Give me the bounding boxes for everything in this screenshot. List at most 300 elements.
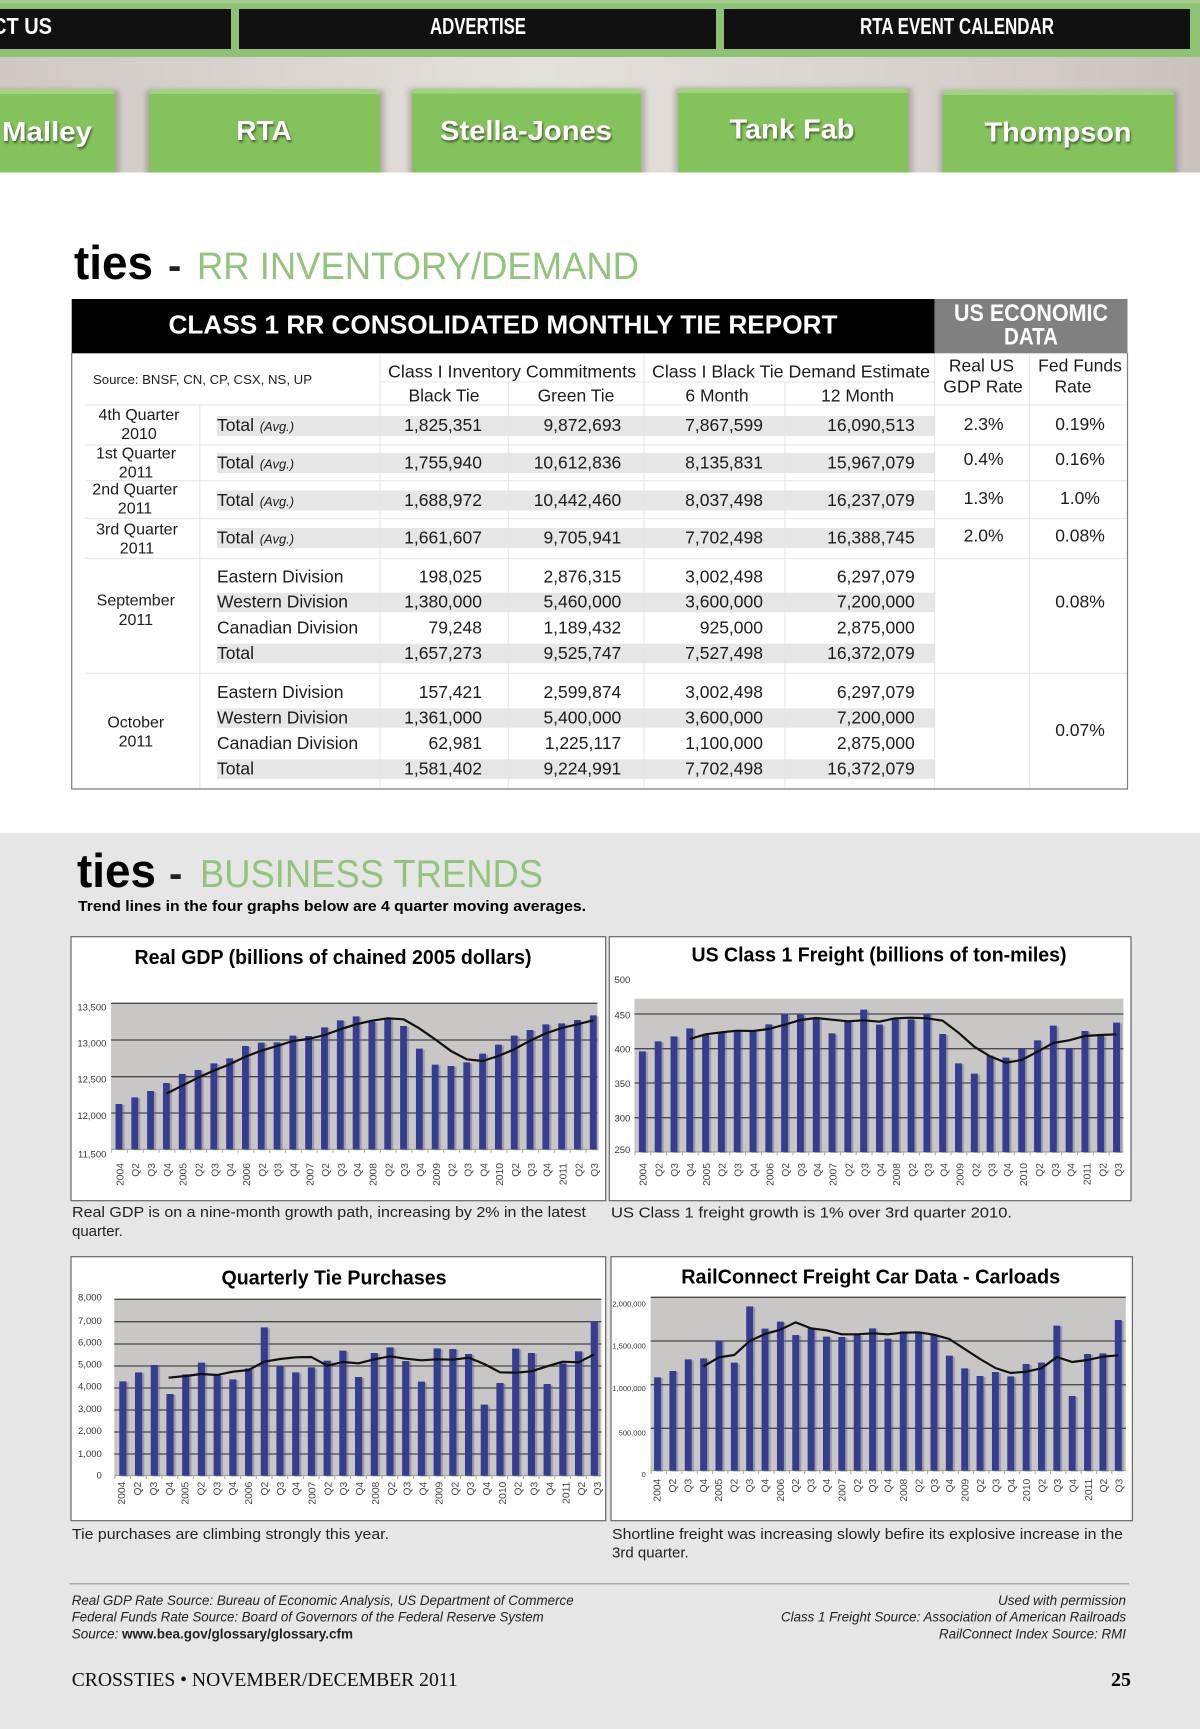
x axis labels: Q2 bbox=[908, 1163, 919, 1177]
x axis labels: Q2 bbox=[384, 1163, 395, 1177]
rows: October 2011: 1,361,000 bbox=[404, 707, 482, 727]
x axis labels: 2009 bbox=[956, 1163, 967, 1186]
x axis labels: 2011 bbox=[1083, 1163, 1094, 1185]
plot with bars and trend line bbox=[111, 1003, 597, 1151]
x axis labels: Q4 bbox=[884, 1478, 895, 1492]
x axis labels bbox=[115, 1163, 601, 1186]
rows: September 2011: 0.08% bbox=[1055, 591, 1105, 611]
nav item: advertise: ADVERTISE bbox=[430, 13, 526, 39]
x axis labels: Q3 bbox=[683, 1478, 694, 1492]
row: 3rd quarter 2011: 7,702,498 bbox=[685, 527, 763, 547]
rows: October 2011: 2,875,000 bbox=[837, 733, 915, 753]
y axis labels: 1,000 bbox=[78, 1449, 102, 1460]
row: 4th quarter 2010: 2.3% bbox=[964, 414, 1004, 434]
rows: October 2011: 2011 bbox=[119, 734, 153, 751]
x axis labels: Q3 bbox=[464, 1163, 475, 1177]
row: 2nd quarter 2011: 1.0% bbox=[1060, 488, 1100, 508]
y axis labels: 500 bbox=[614, 975, 630, 986]
x axis labels: Q2 bbox=[131, 1163, 142, 1177]
x axis labels: Q3 bbox=[593, 1481, 604, 1495]
y axis labels: 500,000 bbox=[619, 1428, 646, 1437]
rows: October 2011: 7,200,000 bbox=[837, 707, 915, 727]
rows: September 2011: Eastern Division bbox=[217, 566, 343, 586]
row: 3rd quarter 2011: 9,705,941 bbox=[543, 527, 621, 547]
heading: ties - RR inventory/demand: RR INVENTORY/DEMAND bbox=[197, 246, 639, 288]
x axis labels: Q3 bbox=[868, 1478, 879, 1492]
US economic data header bbox=[935, 299, 1128, 353]
y axis labels: 3,000 bbox=[78, 1404, 102, 1415]
rows: September 2011: 79,248 bbox=[428, 617, 482, 637]
rows: September 2011: 9,525,747 bbox=[543, 643, 621, 663]
source notes left: Federal Funds Rate Source: Board of Governors of the Federal Reserve System bbox=[72, 1610, 544, 1625]
row: 1st quarter 2011 bbox=[96, 445, 1105, 481]
x axis labels: Q4 bbox=[822, 1478, 833, 1492]
y axis labels: 13,000 bbox=[77, 1039, 106, 1050]
x axis labels: Q4 bbox=[543, 1163, 554, 1177]
y axis labels: 400 bbox=[614, 1045, 630, 1056]
x axis labels: Q4 bbox=[226, 1163, 237, 1177]
x axis labels: Q4 bbox=[749, 1163, 760, 1177]
rows: October 2011: 9,224,991 bbox=[543, 758, 621, 778]
rows: October 2011: 7,702,498 bbox=[685, 758, 763, 778]
row: 4th quarter 2010: 16,090,513 bbox=[827, 415, 915, 435]
table title bar bbox=[72, 299, 935, 353]
row: 2nd quarter 2011: 1,688,972 bbox=[404, 490, 482, 510]
x axis labels: 2005 bbox=[181, 1481, 192, 1505]
button: Stella-Jones: Stella-Jones bbox=[440, 115, 612, 146]
row: 4th quarter 2010: 1,825,351 bbox=[404, 415, 482, 435]
rows: October 2011: 5,400,000 bbox=[543, 707, 622, 727]
rows: September 2011: 16,372,079 bbox=[827, 643, 915, 663]
rows: September 2011: Total bbox=[217, 643, 254, 663]
chart title: Quarterly Tie Purchases bbox=[222, 1267, 446, 1289]
heading: ties - business trends: ties bbox=[77, 844, 156, 897]
row: 1st quarter 2011: Total bbox=[217, 452, 254, 472]
row: 2nd quarter 2011: Total bbox=[217, 490, 254, 510]
x axis labels: Q4 bbox=[355, 1481, 366, 1495]
button: Thompson: Thompson bbox=[984, 117, 1132, 148]
row: 3rd quarter 2011 bbox=[96, 521, 1105, 557]
rows: September 2011: Canadian Division bbox=[217, 617, 358, 637]
x axis labels: Q3 bbox=[527, 1163, 538, 1177]
button: Tank Fab: Tank Fab bbox=[730, 114, 854, 145]
x axis labels: 2011 bbox=[559, 1163, 570, 1185]
rows: October 2011: 3,002,498 bbox=[685, 682, 763, 702]
row: 4th quarter 2010: Total bbox=[217, 415, 254, 435]
x axis labels: 2010 bbox=[495, 1163, 506, 1186]
chart: US Class 1 Freight bbox=[609, 937, 1131, 1222]
rows: October 2011: 16,372,079 bbox=[827, 758, 915, 778]
x axis labels: Q3 bbox=[924, 1163, 935, 1177]
column headers: Black Tie bbox=[408, 385, 480, 405]
nav item: contact us bbox=[0, 9, 231, 49]
y axis labels: 1,500,000 bbox=[612, 1341, 646, 1350]
source notes left: Source: www.bea.gov/glossary/glossary.cfm bbox=[72, 1626, 353, 1641]
row: 4th quarter 2010: 9,872,693 bbox=[543, 415, 621, 435]
x axis labels: Q2 bbox=[668, 1478, 679, 1492]
x axis labels: Q2 bbox=[976, 1478, 987, 1492]
rows: October 2011: 0.07% bbox=[1055, 720, 1105, 740]
chart title: US Class 1 Freight (billions of ton-miles) bbox=[692, 945, 1066, 967]
x axis labels: Q2 bbox=[853, 1478, 864, 1492]
y axis labels: 2,000,000 bbox=[612, 1299, 646, 1308]
row: 2nd quarter 2011: 10,442,460 bbox=[534, 490, 622, 510]
row: 2nd quarter 2011: 1.3% bbox=[964, 488, 1004, 508]
x axis labels: Q2 bbox=[514, 1481, 525, 1495]
rows: September 2011: 6,297,079 bbox=[837, 566, 915, 586]
rows: September 2011: 5,460,000 bbox=[543, 592, 622, 612]
button: Stella-Jones bbox=[412, 88, 641, 172]
button: Malley bbox=[0, 89, 115, 172]
x axis labels: Q3 bbox=[210, 1163, 221, 1177]
rows: October 2011: 3,600,000 bbox=[685, 707, 763, 727]
nav item: RTA event calendar: RTA EVENT CALENDAR bbox=[860, 13, 1054, 39]
x axis labels: Q2 bbox=[718, 1163, 729, 1177]
x axis labels: Q4 bbox=[418, 1481, 429, 1495]
source notes right bbox=[781, 1593, 1126, 1641]
x axis labels: Q4 bbox=[163, 1163, 174, 1177]
row: 1st quarter 2011: 2011 bbox=[119, 464, 153, 481]
x axis labels: Q4 bbox=[940, 1163, 951, 1177]
x axis labels: 2008 bbox=[899, 1478, 910, 1502]
footer: publication line: CROSSTIES • NOVEMBER/DECEMBER 2011 bbox=[72, 1669, 458, 1691]
x axis labels: Q3 bbox=[1053, 1478, 1064, 1492]
row: 4th quarter 2010: 7,867,599 bbox=[685, 415, 763, 435]
x axis labels: Q3 bbox=[400, 1163, 411, 1177]
x axis labels: Q3 bbox=[670, 1163, 681, 1177]
y axis labels: 250 bbox=[614, 1145, 630, 1156]
rows: September 2011: 7,527,498 bbox=[685, 643, 763, 663]
source notes left: Real GDP Rate Source: Bureau of Economic Analysis, US Department of Commerce bbox=[72, 1593, 574, 1608]
row: 2nd quarter 2011: 2nd Quarter bbox=[92, 481, 178, 498]
x axis labels: 2010 bbox=[1022, 1478, 1033, 1502]
caption bbox=[612, 1526, 1123, 1562]
x axis labels: Q3 bbox=[149, 1481, 160, 1495]
rows: September 2011: 3,002,498 bbox=[685, 566, 763, 586]
y axis labels: 11,500 bbox=[78, 1149, 106, 1160]
x axis labels: 2011 bbox=[561, 1481, 572, 1504]
x axis labels: Q3 bbox=[466, 1481, 477, 1495]
x axis labels: Q2 bbox=[450, 1481, 461, 1495]
x axis labels: Q2 bbox=[194, 1163, 205, 1177]
x axis labels: Q2 bbox=[323, 1481, 334, 1495]
tab band with green company buttons bbox=[0, 57, 1200, 196]
x axis labels: Q4 bbox=[1068, 1478, 1079, 1492]
x axis labels: Q2 bbox=[260, 1481, 271, 1495]
column headers: Class I Black Tie Demand Estimate bbox=[652, 361, 930, 381]
chart title: RailConnect Freight Car Data - Carloads bbox=[681, 1266, 1060, 1288]
x axis labels: Q2 bbox=[577, 1481, 588, 1495]
x axis labels: Q2 bbox=[845, 1163, 856, 1177]
row: 3rd quarter 2011: 2.0% bbox=[964, 526, 1004, 546]
x axis labels: Q2 bbox=[511, 1163, 522, 1177]
x axis labels: Q2 bbox=[258, 1163, 269, 1177]
column headers: Fed Funds bbox=[1038, 356, 1122, 376]
column headers: Source: BNSF, CN, CP, CSX, NS, UP bbox=[93, 372, 312, 387]
nav item: RTA event calendar bbox=[724, 9, 1190, 49]
table title bar: CLASS 1 RR CONSOLIDATED MONTHLY TIE REPORT bbox=[168, 309, 838, 339]
x axis labels: Q3 bbox=[807, 1478, 818, 1492]
row: 1st quarter 2011: 15,967,079 bbox=[827, 452, 915, 472]
row: 3rd quarter 2011: 2011 bbox=[120, 540, 154, 557]
row: 1st quarter 2011: 0.16% bbox=[1055, 449, 1105, 469]
rows: October 2011: Total bbox=[217, 758, 254, 778]
rows: October 2011: 62,981 bbox=[428, 733, 482, 753]
source notes right: Class 1 Freight Source: Association of American Railroads bbox=[781, 1610, 1126, 1625]
caption: Tie purchases are climbing strongly this year. bbox=[72, 1526, 389, 1543]
column headers: Rate bbox=[1055, 377, 1091, 397]
x axis labels: Q2 bbox=[972, 1163, 983, 1177]
note: trend lines: Trend lines in the four graphs below are 4 quarter moving averages. bbox=[78, 898, 586, 915]
row: 4th quarter 2010: 2010 bbox=[121, 426, 157, 443]
row: 1st quarter 2011: 10,612,836 bbox=[534, 452, 621, 472]
caption: Shortline freight was increasing slowly befire its explosive increase in the bbox=[612, 1526, 1123, 1543]
y axis labels: 5,000 bbox=[78, 1360, 102, 1371]
x axis labels: Q3 bbox=[530, 1481, 541, 1495]
footer: page number: 25 bbox=[1111, 1669, 1131, 1691]
x axis labels: Q4 bbox=[545, 1481, 556, 1495]
x axis labels: Q2 bbox=[133, 1481, 144, 1495]
row: 3rd quarter 2011: 1,661,607 bbox=[404, 527, 482, 547]
row: 2nd quarter 2011: 8,037,498 bbox=[685, 490, 763, 510]
x axis labels: Q4 bbox=[760, 1478, 771, 1492]
button: Tank Fab bbox=[678, 88, 908, 172]
table band shading bbox=[217, 416, 935, 779]
y axis labels bbox=[614, 975, 630, 1156]
x axis labels: Q2 bbox=[448, 1163, 459, 1177]
rows: September 2011: 1,189,432 bbox=[543, 617, 621, 637]
x axis labels: Q2 bbox=[1035, 1163, 1046, 1177]
caption: 3rd quarter. bbox=[612, 1545, 689, 1562]
heading: ties - business trends: BUSINESS TRENDS bbox=[200, 853, 543, 896]
x axis labels: Q3 bbox=[212, 1481, 223, 1495]
heading: ties - RR inventory/demand bbox=[74, 236, 639, 289]
x axis labels bbox=[117, 1481, 604, 1505]
y axis labels: 1,000,000 bbox=[612, 1384, 646, 1393]
row: 1st quarter 2011: (Avg.) bbox=[260, 456, 294, 471]
caption: Real GDP is on a nine-month growth path, increasing by 2% in the latest bbox=[72, 1204, 587, 1221]
y axis labels: 300 bbox=[614, 1114, 630, 1125]
rows: September 2011: 1,657,273 bbox=[404, 643, 482, 663]
row: 3rd quarter 2011: Total bbox=[217, 527, 254, 547]
row: 1st quarter 2011: 1,755,940 bbox=[404, 452, 482, 472]
row: 2nd quarter 2011: 16,237,079 bbox=[827, 490, 915, 510]
row: 3rd quarter 2011: 16,388,745 bbox=[827, 527, 915, 547]
y axis labels: 0 bbox=[97, 1470, 102, 1481]
row: 4th quarter 2010: 0.19% bbox=[1055, 414, 1105, 434]
heading: ties - business trends bbox=[77, 844, 543, 897]
x axis labels: Q2 bbox=[730, 1478, 741, 1492]
x axis labels: 2004 bbox=[117, 1481, 128, 1505]
row: 3rd quarter 2011: 0.08% bbox=[1055, 526, 1105, 546]
rows: September 2011: 3,600,000 bbox=[685, 592, 763, 612]
x axis labels: Q3 bbox=[987, 1163, 998, 1177]
x axis labels: 2005 bbox=[179, 1163, 190, 1186]
US economic data header: US ECONOMIC bbox=[954, 300, 1108, 327]
x axis labels: Q3 bbox=[147, 1163, 158, 1177]
x axis labels: Q2 bbox=[791, 1478, 802, 1492]
button: Malley: Malley bbox=[2, 116, 92, 147]
y axis labels: 6,000 bbox=[78, 1338, 102, 1349]
rows: September 2011: 198,025 bbox=[419, 566, 482, 586]
rows: September 2011: 7,200,000 bbox=[837, 592, 915, 612]
rows: October 2011: Western Division bbox=[217, 707, 348, 727]
rows: October 2011: 2,599,874 bbox=[543, 682, 622, 702]
column headers: GDP Rate bbox=[943, 377, 1023, 397]
panel: consolidated monthly tie report table bbox=[72, 299, 1128, 789]
x axis labels: Q3 bbox=[734, 1163, 745, 1177]
caption: US Class 1 freight growth is 1% over 3rd quarter 2010. bbox=[611, 1205, 1012, 1222]
x axis labels: Q2 bbox=[781, 1163, 792, 1177]
rows: September 2011 bbox=[97, 566, 1105, 663]
x axis labels: Q3 bbox=[337, 1163, 348, 1177]
plot with bars and trend line bbox=[651, 1297, 1126, 1472]
heading: ties - RR inventory/demand: - bbox=[168, 244, 181, 288]
x axis labels: 2006 bbox=[765, 1163, 776, 1186]
x axis labels bbox=[638, 1163, 1125, 1186]
x axis labels: 2007 bbox=[829, 1163, 840, 1186]
row: 2nd quarter 2011: 2011 bbox=[118, 500, 152, 517]
x axis labels: Q4 bbox=[165, 1481, 176, 1495]
column headers: Class I Inventory Commitments bbox=[388, 361, 636, 381]
x axis labels: Q3 bbox=[991, 1478, 1002, 1492]
row: 1st quarter 2011: 0.4% bbox=[964, 449, 1004, 469]
rows: September 2011: 2,875,000 bbox=[837, 617, 915, 637]
x axis labels: 2011 bbox=[1084, 1478, 1095, 1501]
x axis labels: Q4 bbox=[1003, 1163, 1014, 1177]
x axis labels: Q4 bbox=[479, 1163, 490, 1177]
nav item: advertise bbox=[239, 9, 716, 49]
heading: ties - business trends: - bbox=[169, 852, 182, 896]
x axis labels: Q3 bbox=[797, 1163, 808, 1177]
rows: October 2011: 6,297,079 bbox=[837, 682, 915, 702]
y axis labels bbox=[612, 1299, 646, 1479]
row: 4th quarter 2010: (Avg.) bbox=[260, 419, 294, 434]
x axis labels: Q2 bbox=[574, 1163, 585, 1177]
x axis labels: Q2 bbox=[1099, 1478, 1110, 1492]
rows: September 2011: 925,000 bbox=[700, 617, 763, 637]
x axis labels: Q3 bbox=[860, 1163, 871, 1177]
x axis labels: 2007 bbox=[837, 1478, 848, 1502]
row: 3rd quarter 2011: (Avg.) bbox=[260, 531, 294, 546]
chart: RailConnect Freight Car Data - Carloads bbox=[611, 1257, 1132, 1562]
rows: October 2011: Canadian Division bbox=[217, 733, 358, 753]
x axis labels: 2004 bbox=[115, 1163, 126, 1186]
y axis labels bbox=[78, 1292, 102, 1481]
rows: October 2011: 157,421 bbox=[419, 682, 482, 702]
rows: September 2011: Western Division bbox=[217, 592, 348, 612]
x axis labels: Q2 bbox=[654, 1163, 665, 1177]
caption: quarter. bbox=[72, 1223, 123, 1240]
x axis labels: 2008 bbox=[892, 1163, 903, 1186]
x axis labels: Q3 bbox=[276, 1481, 287, 1495]
rows: October 2011 bbox=[107, 682, 1105, 778]
y axis labels: 2,000 bbox=[78, 1426, 102, 1437]
plot with bars and trend line bbox=[634, 999, 1123, 1154]
button: RTA: RTA bbox=[236, 115, 292, 146]
x axis labels: Q3 bbox=[590, 1163, 601, 1177]
x axis labels: 2007 bbox=[305, 1163, 316, 1186]
rows: September 2011: 2011 bbox=[119, 612, 153, 629]
x axis labels: 2007 bbox=[308, 1481, 318, 1505]
x axis labels: Q2 bbox=[196, 1481, 208, 1495]
y axis labels: 0 bbox=[642, 1470, 646, 1479]
plot with bars and trend line bbox=[114, 1299, 601, 1477]
x axis labels: Q4 bbox=[686, 1163, 697, 1177]
y axis labels: 350 bbox=[614, 1079, 630, 1090]
row: 2nd quarter 2011 bbox=[92, 481, 1100, 517]
x axis labels: Q4 bbox=[353, 1163, 364, 1177]
top navigation bar bbox=[0, 0, 1200, 57]
rows: September 2011: September bbox=[97, 593, 176, 610]
x axis labels: Q4 bbox=[813, 1163, 824, 1177]
row: 3rd quarter 2011: 3rd Quarter bbox=[96, 521, 179, 538]
y axis labels: 13,500 bbox=[77, 1003, 106, 1014]
x axis labels: Q2 bbox=[1038, 1478, 1049, 1492]
rows: September 2011: 1,380,000 bbox=[404, 592, 482, 612]
heading: ties - RR inventory/demand: ties bbox=[74, 236, 153, 289]
row: 2nd quarter 2011: (Avg.) bbox=[260, 494, 294, 509]
y axis labels: 8,000 bbox=[78, 1292, 102, 1303]
chart title: Real GDP (billions of chained 2005 dollars) bbox=[134, 947, 532, 969]
row: 1st quarter 2011: 1st Quarter bbox=[96, 445, 177, 462]
x axis labels: 2009 bbox=[961, 1478, 972, 1502]
x axis labels: Q3 bbox=[930, 1478, 941, 1492]
x axis labels: Q4 bbox=[416, 1163, 427, 1177]
column headers bbox=[93, 356, 1122, 405]
x axis labels: 2010 bbox=[1019, 1163, 1030, 1186]
x axis labels: Q4 bbox=[289, 1163, 300, 1177]
column headers: 6 Month bbox=[685, 385, 749, 405]
x axis labels: 2006 bbox=[244, 1481, 255, 1505]
rows: September 2011: 2,876,315 bbox=[543, 566, 621, 586]
x axis labels: Q4 bbox=[1067, 1163, 1078, 1177]
x axis labels: 2005 bbox=[702, 1163, 713, 1186]
x axis labels: Q4 bbox=[876, 1163, 887, 1177]
y axis labels: 4,000 bbox=[78, 1382, 102, 1393]
x axis labels: Q3 bbox=[274, 1163, 285, 1177]
x axis labels: 2006 bbox=[242, 1163, 253, 1186]
source notes right: Used with permission bbox=[998, 1593, 1126, 1608]
y axis labels bbox=[77, 1003, 106, 1160]
x axis labels: Q4 bbox=[699, 1478, 710, 1492]
x axis labels: Q4 bbox=[292, 1481, 303, 1495]
x axis labels: Q3 bbox=[339, 1481, 350, 1495]
button: RTA bbox=[149, 89, 380, 172]
x axis labels bbox=[653, 1478, 1126, 1502]
y axis labels: 450 bbox=[614, 1011, 630, 1022]
x axis labels: Q4 bbox=[482, 1481, 493, 1495]
source notes right: RailConnect Index Source: RMI bbox=[939, 1626, 1126, 1641]
x axis labels: 2008 bbox=[369, 1163, 380, 1186]
x axis labels: Q4 bbox=[228, 1481, 239, 1495]
x axis labels: Q3 bbox=[745, 1478, 756, 1492]
x axis labels: Q3 bbox=[403, 1481, 414, 1495]
source notes left bbox=[72, 1593, 574, 1641]
x axis labels: 2005 bbox=[714, 1478, 725, 1502]
chart: Quarterly Tie Purchases bbox=[71, 1257, 606, 1543]
y axis labels: 12,500 bbox=[77, 1074, 106, 1085]
y axis labels: 7,000 bbox=[78, 1316, 102, 1327]
x axis labels: Q4 bbox=[1007, 1478, 1018, 1492]
column headers: Green Tie bbox=[538, 385, 614, 405]
x axis labels: Q2 bbox=[387, 1481, 398, 1495]
rows: October 2011: 1,581,402 bbox=[404, 758, 482, 778]
button: Thompson bbox=[943, 90, 1174, 172]
x axis labels: Q3 bbox=[1051, 1163, 1062, 1177]
column headers: 12 Month bbox=[821, 385, 894, 405]
rows: October 2011: October bbox=[107, 714, 165, 731]
